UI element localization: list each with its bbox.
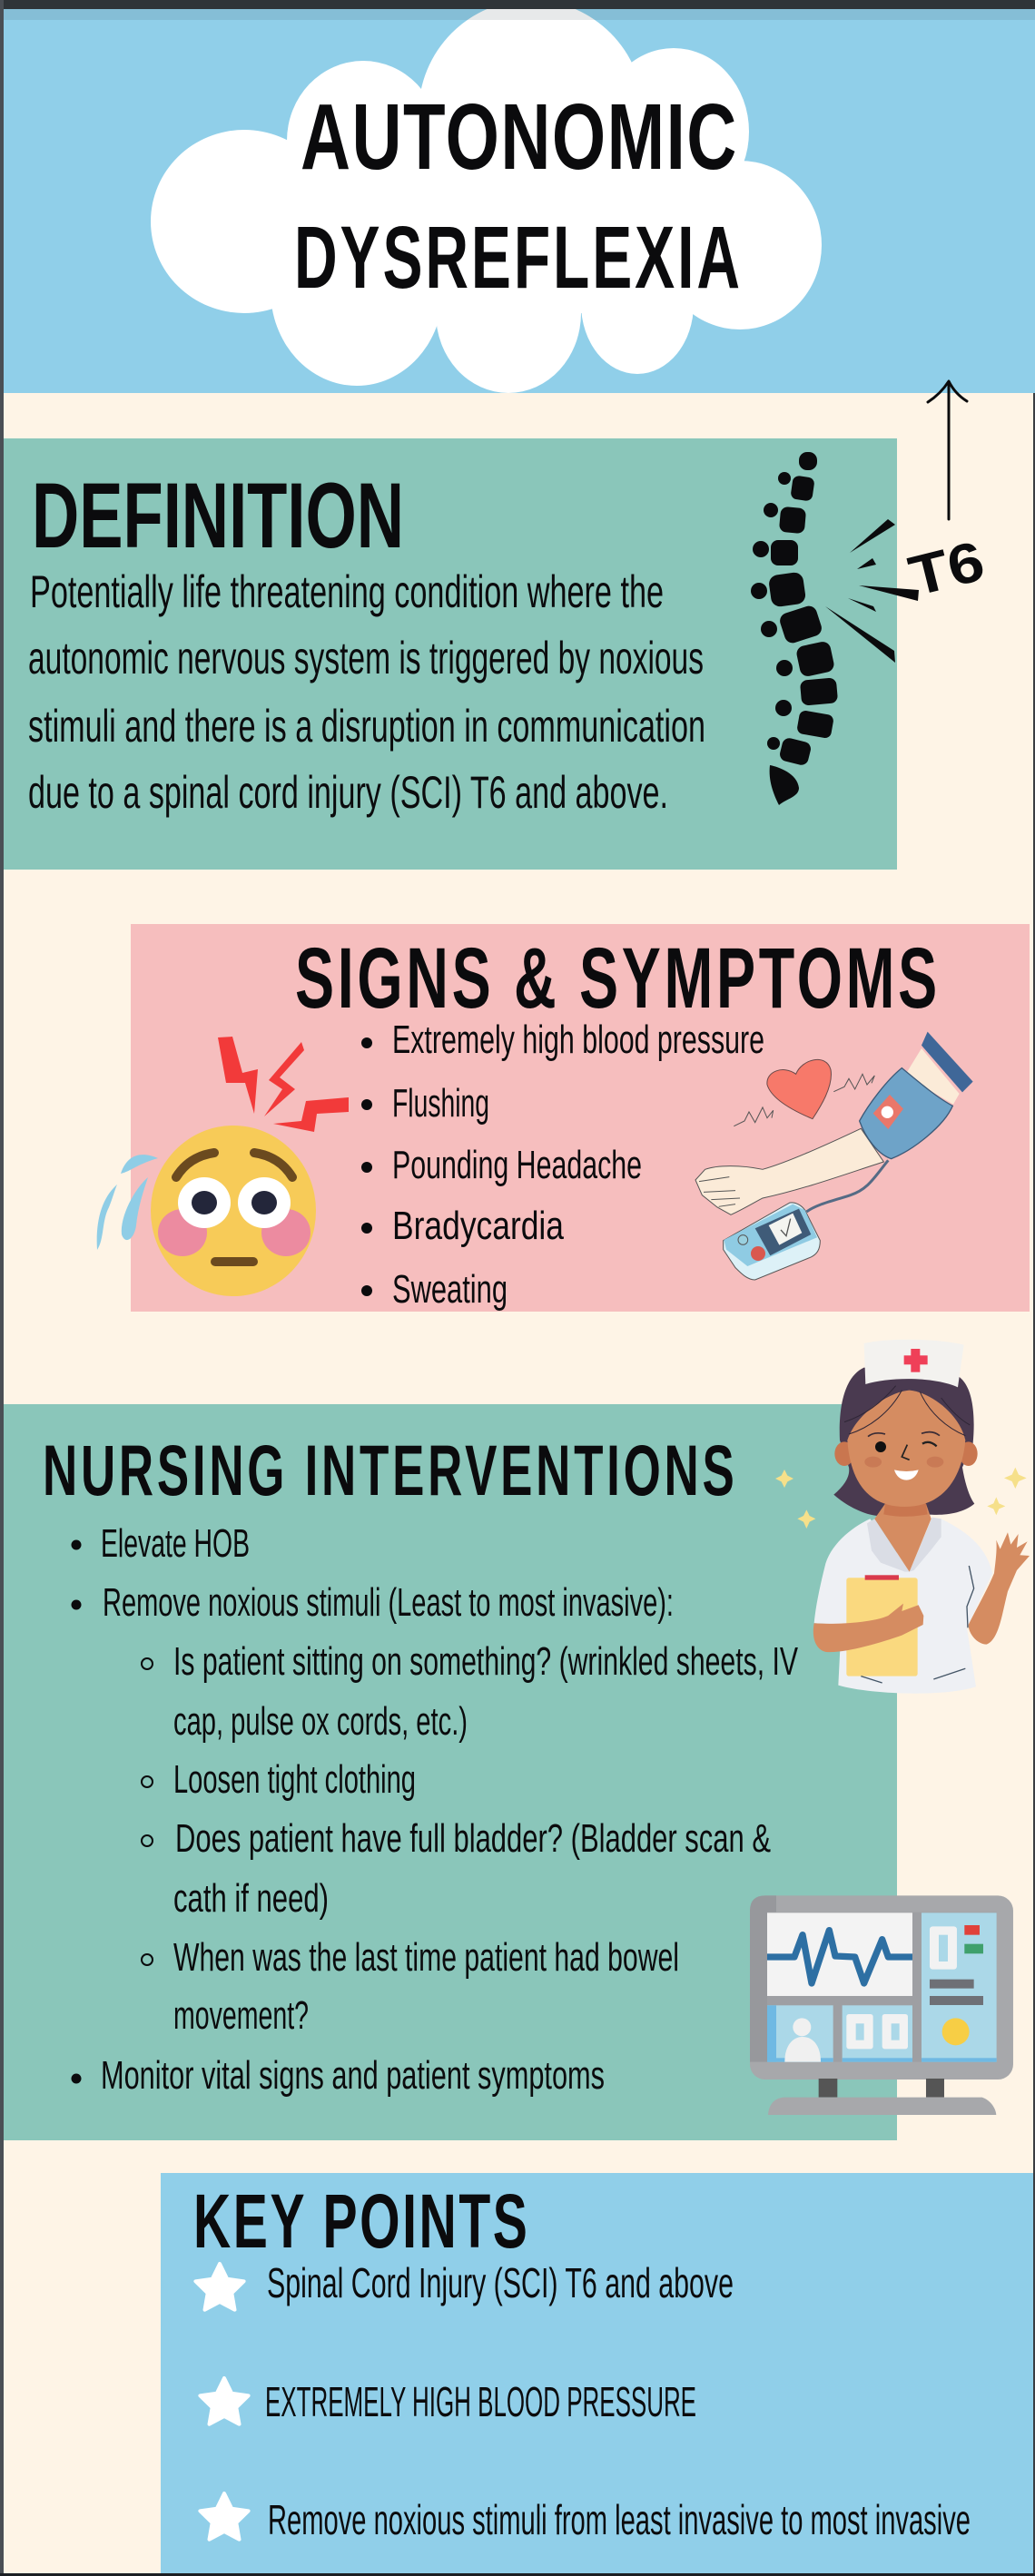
list: symptoms: Pounding Headache [392,1143,642,1187]
title: AUTONOMIC [301,85,736,190]
text block: definition body: Potentially life threatening condition where the [30,566,664,617]
list: interventions: Does patient have full bladder? (Bladder scan & [175,1816,771,1861]
list: interventions: Elevate HOB [101,1521,250,1566]
text block: definition body: due to a spinal cord injury (SCI) T6 and above. [28,767,668,818]
panel: nursing interventions [4,1404,897,2140]
icon: star 3 [200,2493,249,2540]
header band [0,0,1035,393]
panel: definition [4,438,897,870]
icon: star 1 [195,2264,244,2310]
label: T6: T6 [903,530,991,608]
heading: key points: KEY POINTS [193,2179,527,2265]
icon: vital signs monitor [750,1895,1013,2115]
text: key point 1: Spinal Cord Injury (SCI) T6 and above [267,2259,734,2306]
icon: cloud [151,0,822,393]
panel: key points [161,2173,1035,2573]
text block: definition body: stimuli and there is a disruption in communication [28,701,705,752]
text block: definition body: autonomic nervous system is triggered by noxious [28,633,704,683]
arrow: T6 upward [928,381,967,519]
list: interventions [71,1521,798,2098]
icon: blood pressure cuff on arm [695,1032,973,1280]
heading: nursing interventions: NURSING INTERVENTIONS [43,1431,734,1511]
list: symptoms [361,1018,764,1312]
list: symptoms: Bradycardia [392,1204,564,1248]
list: interventions: cath if need) [173,1876,329,1921]
heading: signs and symptoms: SIGNS & SYMPTOMS [295,930,937,1027]
panel: signs and symptoms [131,924,1030,1312]
icon: star 2 [200,2378,249,2424]
icon: rays [825,519,919,663]
list: symptoms: Extremely high blood pressure [392,1018,764,1062]
text block: definition body [28,566,705,818]
list: interventions: Remove noxious stimuli (Least to most invasive): [103,1580,674,1625]
list: interventions: When was the last time patient had bowel [173,1935,679,1980]
text: key point 2: EXTREMELY HIGH BLOOD PRESSURE [265,2378,696,2425]
title: DYSREFLEXIA [294,208,740,307]
list: interventions: movement? [173,1993,309,2038]
icon: headache bolts [218,1037,349,1132]
heading: definition: DEFINITION [32,464,404,567]
list: symptoms: Sweating [392,1267,508,1312]
title [294,85,740,307]
icon: nurse [775,1340,1030,1694]
list: interventions: Monitor vital signs and patient symptoms [101,2053,605,2098]
list: interventions: Loosen tight clothing [173,1757,416,1802]
icon: spine [751,452,838,805]
list: interventions: cap, pulse ox cords, etc.) [173,1699,468,1744]
icon: flushed face [151,1126,316,1296]
list: symptoms: Flushing [392,1081,489,1126]
icon: sweat drops [97,1155,158,1250]
